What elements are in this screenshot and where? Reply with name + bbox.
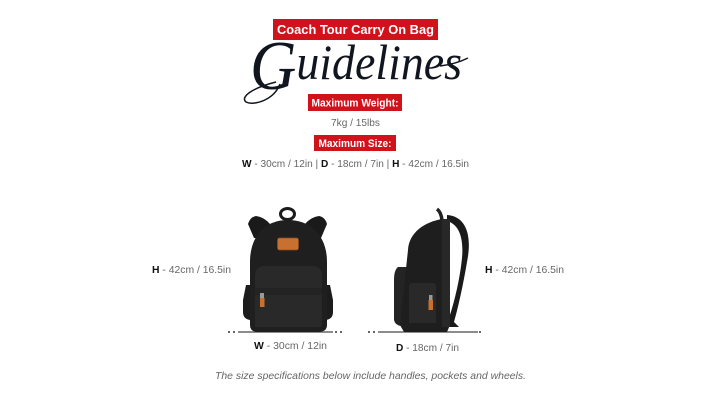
front pocket xyxy=(394,267,410,326)
side pocket xyxy=(409,283,436,323)
badge: Maximum Weight: Maximum Weight: xyxy=(312,98,398,110)
heading badge: Coach Tour Carry On Bag: Coach Tour Carry On Bag xyxy=(277,22,434,37)
zip band xyxy=(255,288,322,295)
shoulder strap xyxy=(447,215,469,327)
footnote: The size specifications below include handles, pockets and wheels. xyxy=(215,370,526,382)
text: size summary: W - 30cm / 12in | D - 18cm / 7in | H - 42cm / 16.5in xyxy=(242,158,469,170)
top handle xyxy=(280,208,294,220)
title flourish xyxy=(244,58,468,103)
script title: Guidelines: uidelines xyxy=(296,34,462,90)
script title: Guidelines xyxy=(244,28,468,105)
label: height right: H - 42cm / 16.5in xyxy=(485,264,564,276)
shoulder straps xyxy=(248,216,327,238)
side pockets xyxy=(243,285,333,320)
label: width: W - 30cm / 12in xyxy=(254,340,327,352)
zip pull xyxy=(260,293,264,307)
ground line: depth xyxy=(368,331,484,333)
main body xyxy=(250,220,327,332)
icon: backpack front view xyxy=(228,208,344,332)
label: depth: D - 18cm / 7in xyxy=(396,342,459,354)
script title: Guidelines: G xyxy=(250,28,296,105)
top handle xyxy=(437,209,442,220)
text: weight value: 7kg / 15lbs xyxy=(331,117,380,129)
front pocket xyxy=(255,266,322,327)
label: height left: H - 42cm / 16.5in xyxy=(152,264,231,276)
icon: backpack side view xyxy=(368,209,484,332)
leather patch xyxy=(278,238,298,250)
main body xyxy=(400,219,450,332)
ground line: width xyxy=(228,331,344,333)
zip pull xyxy=(428,295,433,310)
badge: Maximum Size: Maximum Size: xyxy=(318,138,392,150)
badge: Maximum Size xyxy=(314,135,396,151)
badge: Maximum Weight xyxy=(308,94,402,111)
back panel xyxy=(442,219,450,327)
heading badge: Coach Tour Carry On Bag xyxy=(273,19,438,40)
